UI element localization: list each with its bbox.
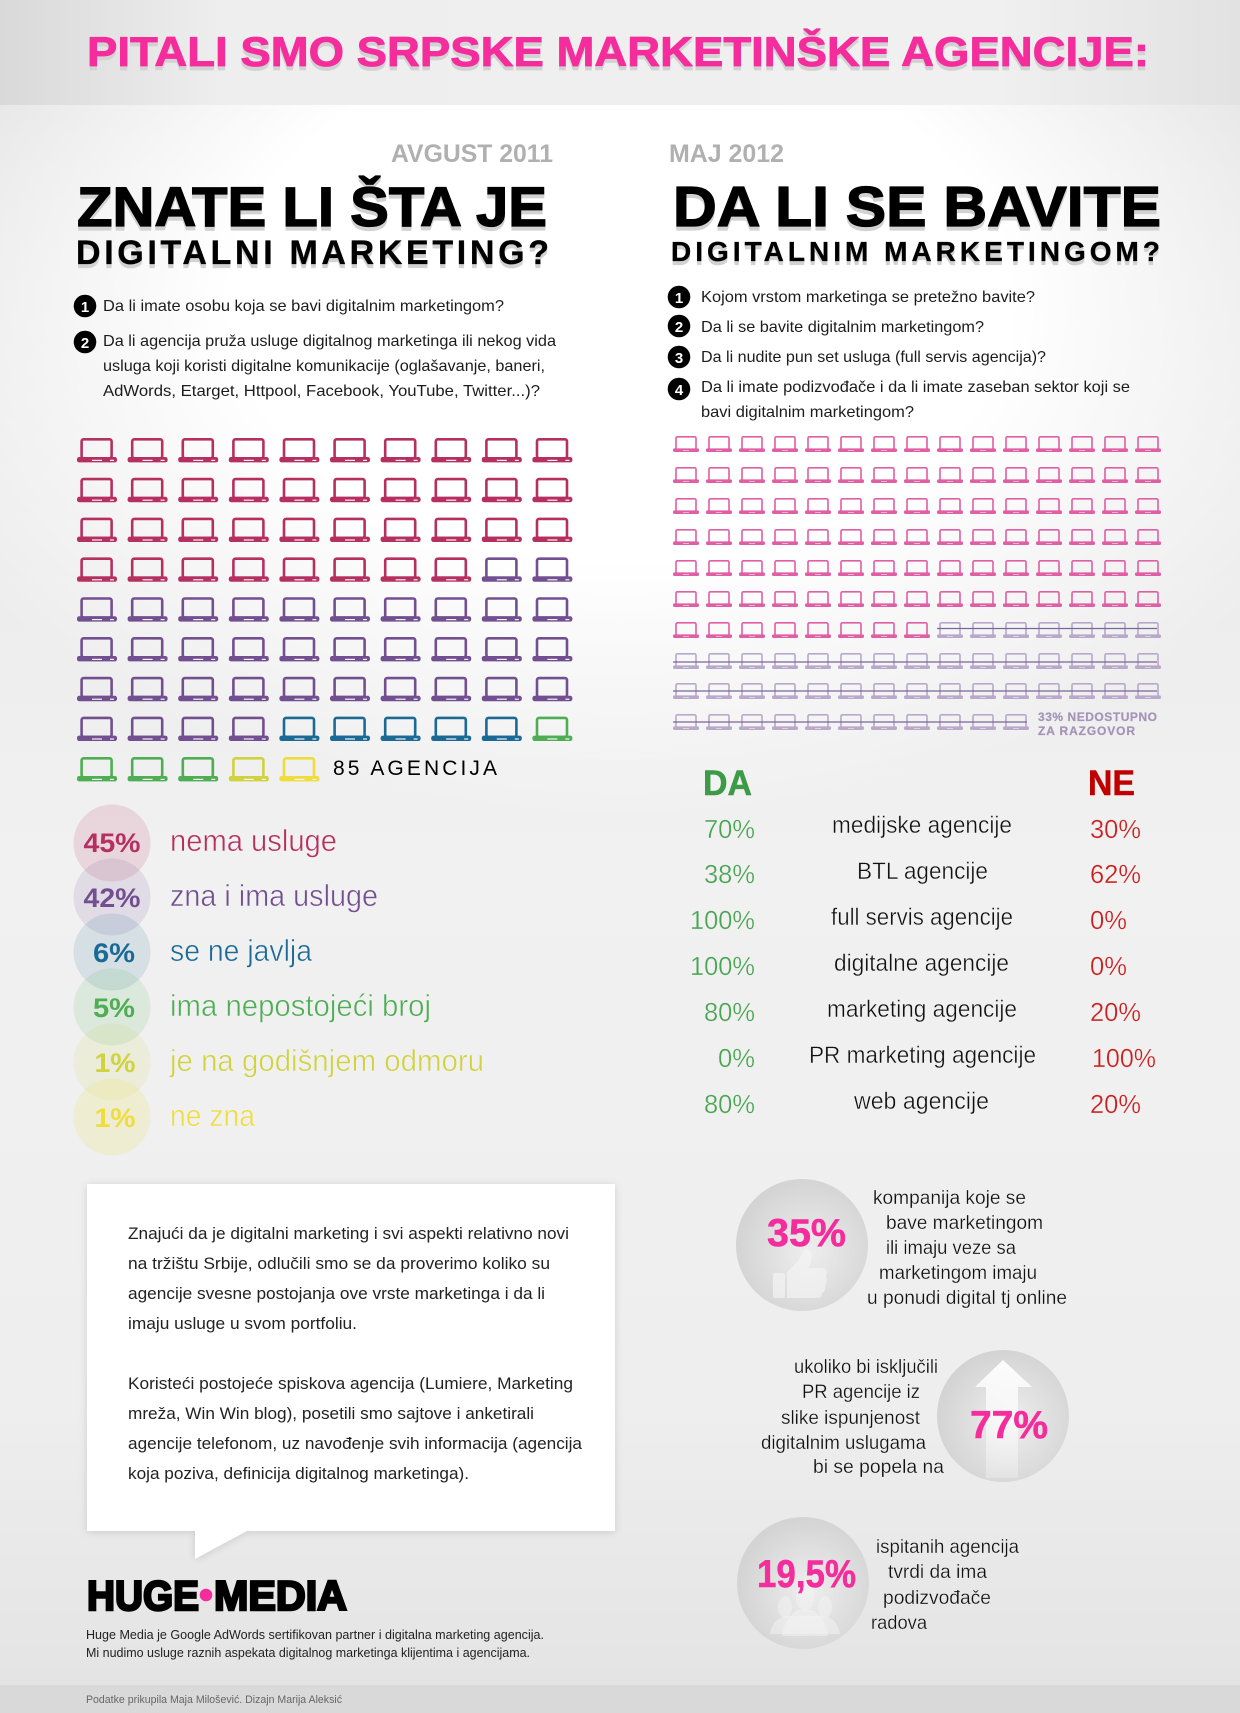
legend item: 42%: zna i ima usluge xyxy=(170,878,378,913)
header band xyxy=(0,0,1240,105)
icon: people xyxy=(770,1583,840,1636)
description: slike ispunjenost xyxy=(781,1407,921,1429)
question 2 xyxy=(668,315,984,337)
agency description: Huge Media je Google AdWords sertifikovan partner i digitalna marketing agencija. xyxy=(86,1628,544,1642)
footer band xyxy=(0,1685,1240,1713)
row: btl xyxy=(704,858,1141,889)
speech bubble: intro text xyxy=(87,1184,615,1559)
stat: 35% xyxy=(736,1179,1067,1311)
row: web xyxy=(704,1088,1141,1119)
legend item: 42% xyxy=(74,858,378,936)
legend item: 6% xyxy=(74,914,313,990)
row: medijske: 70% xyxy=(704,814,755,844)
disc xyxy=(937,1350,1069,1482)
heading line 1: DA LI SE BAVITE xyxy=(673,175,1161,239)
row: pr marketing: 0% xyxy=(718,1043,755,1073)
bubble shape xyxy=(87,1184,615,1559)
agency description xyxy=(86,1628,544,1660)
row: digitalne: digitalne agencije xyxy=(834,950,1009,977)
value: 19,5% xyxy=(757,1553,856,1596)
row: web: 80% xyxy=(704,1089,755,1119)
legend item: 5%: 5% xyxy=(93,993,135,1023)
question 1 xyxy=(74,295,504,317)
legend item: 1% on vacation: je na godišnjem odmoru xyxy=(169,1043,484,1078)
question 2: Da li se bavite digitalnim marketingom? xyxy=(701,319,984,336)
description: bi se popela na xyxy=(813,1456,944,1478)
description: PR agencije iz xyxy=(802,1381,920,1403)
question 2 xyxy=(74,331,556,400)
question 1 xyxy=(668,286,1035,308)
row: digitalne xyxy=(690,950,1127,981)
legend item: 1% does not know: ne zna xyxy=(170,1098,256,1133)
question 1: Kojom vrstom marketinga se pretežno bavite? xyxy=(701,289,1035,306)
legend item: 1% does not know xyxy=(74,1078,256,1156)
heading line 2: DIGITALNI MARKETING? xyxy=(76,234,549,272)
row: full servis: 100% xyxy=(690,905,755,935)
description: ukoliko bi isključili xyxy=(794,1356,938,1378)
column heading: ne: NE xyxy=(1088,764,1135,803)
question 3: 3 xyxy=(675,350,683,367)
question 1: Da li imate osobu koja se bavi digitalnim marketingom? xyxy=(103,298,504,315)
legend item: 6%: se ne javlja xyxy=(170,933,313,968)
description xyxy=(871,1536,1019,1634)
description: podizvođače xyxy=(883,1587,991,1609)
value: 35% xyxy=(767,1212,846,1255)
label: 85 agencija: 85 AGENCIJA xyxy=(333,757,497,780)
question 2: AdWords, Etarget, Httpool, Facebook, YouTube, Twitter...)? xyxy=(103,383,540,400)
row: full servis xyxy=(690,904,1127,935)
row: btl: BTL agencije xyxy=(857,858,988,885)
description: marketingom imaju xyxy=(879,1262,1037,1284)
legend item: 1% does not know: 1% xyxy=(94,1103,136,1133)
legend item: 5% xyxy=(74,968,431,1046)
logo: huge media xyxy=(87,1572,347,1619)
paragraph 1: agencije svesne postojanja ove vrste marketinga i da li xyxy=(128,1284,545,1303)
stat: 77% xyxy=(761,1350,1069,1482)
row: pr marketing: 100% xyxy=(1092,1043,1156,1073)
paragraph 2: Koristeći postojeće spiskova agencija (Lumiere, Marketing xyxy=(128,1374,573,1393)
legend item: 5%: ima nepostojeći broj xyxy=(170,988,431,1023)
heading line 2: DIGITALNIM MARKETINGOM? xyxy=(671,236,1160,267)
row: pr marketing: PR marketing agencije xyxy=(809,1042,1036,1069)
question 3 xyxy=(668,346,1046,368)
description: kompanija koje se xyxy=(873,1187,1026,1209)
description: ili imaju veze sa xyxy=(886,1237,1016,1259)
date label: MAJ 2012 xyxy=(669,140,784,168)
row: web: 20% xyxy=(1090,1089,1141,1119)
question 2: 2 xyxy=(675,319,683,336)
row: pr marketing xyxy=(718,1042,1156,1073)
legend item: 45%: 45% xyxy=(84,828,140,858)
paragraph 1 xyxy=(128,1224,569,1333)
logo: huge media: MEDIA xyxy=(214,1572,347,1619)
question 3: Da li nudite pun set usluga (full servis agencija)? xyxy=(701,349,1046,366)
icon: up arrow xyxy=(975,1360,1032,1478)
question 2: usluga koji koristi digitalne komunikacije (oglašavanje, baneri, xyxy=(103,358,545,375)
question 4 xyxy=(668,378,1130,421)
row: digitalne: 0% xyxy=(1090,951,1127,981)
row: full servis: full servis agencije xyxy=(831,904,1013,931)
title: PITALI SMO SRPSKE MARKETINŠKE AGENCIJE: xyxy=(87,27,1149,75)
callout: 33% unavailable: 33% NEDOSTUPNO xyxy=(1038,710,1157,724)
row: medijske xyxy=(704,812,1141,844)
laptop pictogram grid: 85 agencies xyxy=(77,439,572,781)
legend item: 1% on vacation xyxy=(74,1024,484,1100)
question 1: 1 xyxy=(81,299,89,316)
paragraph 2: agencije telefonom, uz navođenje svih informacija (agencija xyxy=(128,1434,583,1453)
legend item: 6%: 6% xyxy=(93,938,135,968)
row: web: web agencije xyxy=(853,1088,989,1115)
disc xyxy=(737,1517,869,1649)
table: da / ne by agency type xyxy=(690,764,1156,1119)
row: digitalne: 100% xyxy=(690,951,755,981)
row: marketing xyxy=(704,996,1141,1027)
question 2: Da li agencija pruža usluge digitalnog marketinga ili nekog vida xyxy=(103,333,556,350)
description: bave marketingom xyxy=(886,1212,1043,1234)
question 4: Da li imate podizvođače i da li imate zaseban sektor koji se xyxy=(701,379,1130,396)
description: radova xyxy=(871,1612,927,1634)
questions: left panel xyxy=(74,295,556,400)
question 4: bavi digitalnim marketingom? xyxy=(701,404,914,421)
panel: avgust 2011 heading xyxy=(76,140,553,272)
row: medijske: 30% xyxy=(1090,814,1141,844)
paragraph 1: imaju usluge u svom portfoliu. xyxy=(128,1314,357,1333)
value: 77% xyxy=(970,1404,1048,1447)
row: btl: 62% xyxy=(1090,859,1141,889)
row: marketing: 80% xyxy=(704,997,755,1027)
description xyxy=(867,1187,1067,1309)
row: medijske: medijske agencije xyxy=(832,812,1012,839)
stat: 19,5% xyxy=(737,1517,1019,1649)
paragraph 2: koja poziva, definicija digitalnog marketinga). xyxy=(128,1464,469,1483)
column heading: da: DA xyxy=(703,764,752,803)
question 2: 2 xyxy=(81,335,89,352)
legend: agency responses xyxy=(74,804,484,1156)
laptop pictogram grid: reachable and unavailable xyxy=(673,437,1161,730)
legend item: 1% on vacation: 1% xyxy=(94,1048,136,1078)
row: btl: 38% xyxy=(704,859,755,889)
question 1: 1 xyxy=(675,290,683,307)
description: u ponudi digital tj online xyxy=(867,1287,1067,1309)
callout: 33% unavailable xyxy=(1038,710,1157,738)
paragraph 1: Znajući da je digitalni marketing i svi aspekti relativno novi xyxy=(128,1224,569,1243)
row: full servis: 0% xyxy=(1090,905,1127,935)
description: tvrdi da ima xyxy=(888,1561,987,1583)
description: ispitanih agencija xyxy=(876,1536,1019,1558)
paragraph 2 xyxy=(128,1374,583,1483)
heading line 1: ZNATE LI ŠTA JE xyxy=(77,175,547,238)
callout: 33% unavailable: ZA RAZGOVOR xyxy=(1038,724,1135,738)
questions: right panel xyxy=(668,286,1130,421)
date label: AVGUST 2011 xyxy=(391,140,553,168)
footer band: Podatke prikupila Maja Milošević. Dizajn Marija Aleksić xyxy=(86,1694,342,1706)
disc xyxy=(736,1179,868,1311)
panel: maj 2012 heading xyxy=(669,140,1161,267)
paragraph 1: na tržištu Srbije, odlučili smo se da proverimo koliko su xyxy=(128,1254,550,1273)
description xyxy=(761,1356,944,1478)
icon: thumbs up xyxy=(773,1249,827,1298)
row: marketing: 20% xyxy=(1090,997,1141,1027)
row: marketing: marketing agencije xyxy=(827,996,1017,1023)
paragraph 2: mreža, Win Win blog), posetili smo sajtove i anketirali xyxy=(128,1404,534,1423)
description: digitalnim uslugama xyxy=(761,1432,926,1454)
agency description: Mi nudimo usluge raznih aspekata digitalnog marketinga klijentima i agencijama. xyxy=(86,1646,530,1660)
logo: huge media: HUGE xyxy=(87,1572,199,1619)
legend item: 45%: nema usluge xyxy=(170,823,337,858)
question 4: 4 xyxy=(675,382,684,399)
legend item: 42%: 42% xyxy=(84,883,140,913)
legend item: 45% xyxy=(74,804,337,882)
